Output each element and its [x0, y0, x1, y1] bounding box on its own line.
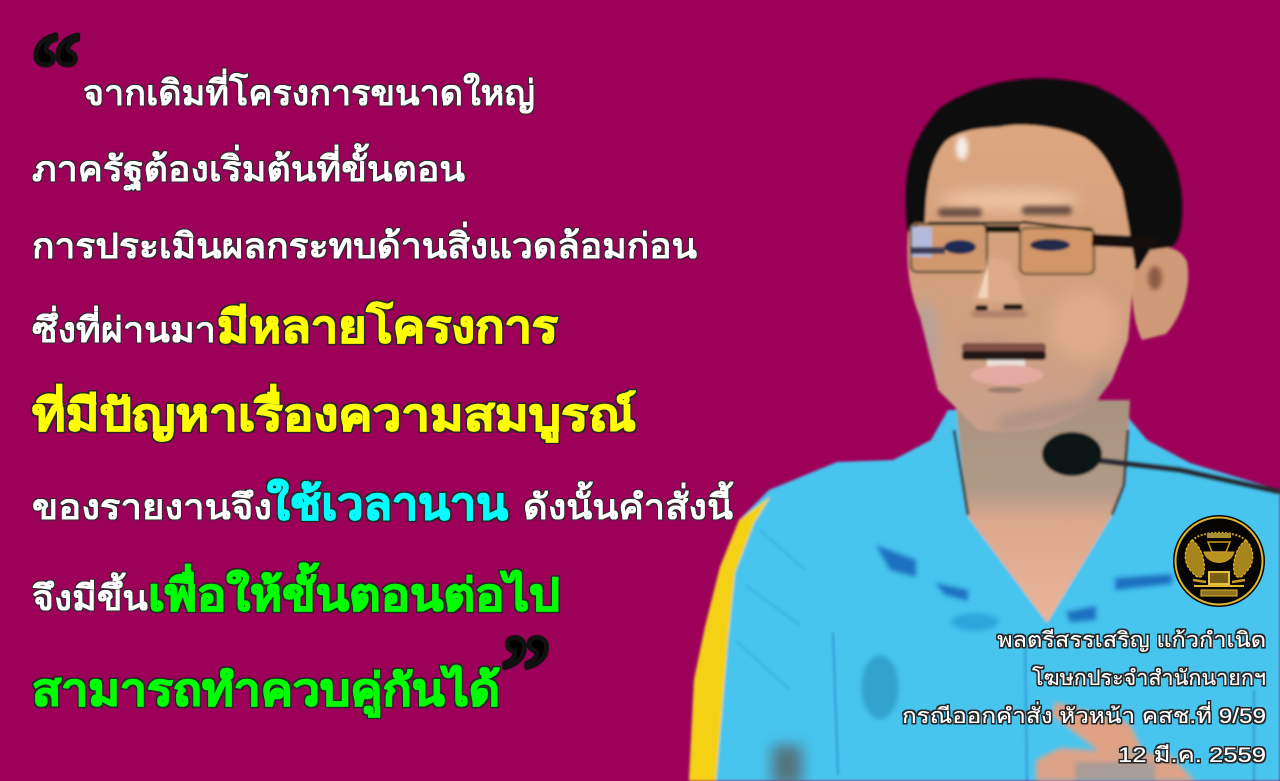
line 7 lead-in: จึงมีขึ้น [32, 572, 148, 618]
seal of the prime minister's office [1173, 515, 1265, 607]
seal gold ring [1176, 518, 1262, 604]
collar shadows [876, 545, 1172, 622]
hair [906, 78, 1182, 270]
seal ornament [1185, 533, 1253, 596]
line 2: ภาครัฐต้องเริ่มต้นที่ขั้นตอน [32, 143, 465, 190]
line 3: การประเมินผลกระทบด้านสิ่งแวดล้อมก่อน [32, 222, 697, 266]
yellow shirt stripe [689, 496, 771, 781]
line 5 highlight: ที่มีปัญหาเรื่องความสมบูรณ์ [32, 384, 636, 442]
quote text [32, 69, 734, 717]
hands [1036, 702, 1195, 781]
neck edge shadows [954, 430, 1128, 515]
seal disc [1173, 515, 1265, 607]
name: พลตรีสรรเสริญ แก้วกำเนิด [997, 629, 1266, 652]
ear shadow [1148, 266, 1162, 290]
nose base shadow [972, 311, 1027, 317]
line 1: จากเดิมที่โครงการขนาดใหญ่ [83, 69, 535, 113]
role: โฆษกประจำสำนักนายกฯ [1032, 666, 1266, 690]
quote mark open: “ [31, 12, 81, 123]
line 6 tail: ดังนั้นคำสั่งนี้ [523, 481, 734, 527]
nostrils [975, 304, 1023, 311]
line 4 lead-in: ซึ่งที่ผ่านมา [32, 306, 216, 350]
line 7 highlight: เพื่อให้ขั้นตอนต่อไป [148, 562, 560, 620]
date: 12 มี.ค. 2559 [1118, 744, 1266, 767]
nose highlight [978, 265, 988, 298]
line 4 highlight: มีหลายโครงการ [217, 300, 558, 352]
ear [1132, 247, 1188, 340]
neck [955, 400, 1130, 623]
line 8 highlight: สามารถทำควบคู่กันได้ [32, 664, 500, 717]
mouth [962, 343, 1046, 393]
subject: กรณีออกคำสั่ง หัวหน้า คสช.ที่ 9/59 [902, 701, 1266, 728]
eyebrows [938, 206, 1072, 217]
microphone [1042, 432, 1280, 492]
shirt folds and seams [735, 530, 1254, 781]
face [907, 125, 1135, 432]
line 6 lead-in: ของรายงานจึง [32, 488, 272, 527]
forehead highlight [956, 136, 968, 160]
portrait photo of spokesman [689, 78, 1280, 781]
spokesman caption [902, 629, 1266, 767]
dark patch at lower left [772, 745, 802, 781]
quote mark close: ” [501, 615, 551, 726]
glasses [910, 222, 1158, 274]
line 6 highlight: ใช้เวลานาน [267, 478, 508, 529]
face shading [911, 190, 1120, 425]
shirt [689, 410, 1280, 781]
nose [972, 255, 1025, 302]
